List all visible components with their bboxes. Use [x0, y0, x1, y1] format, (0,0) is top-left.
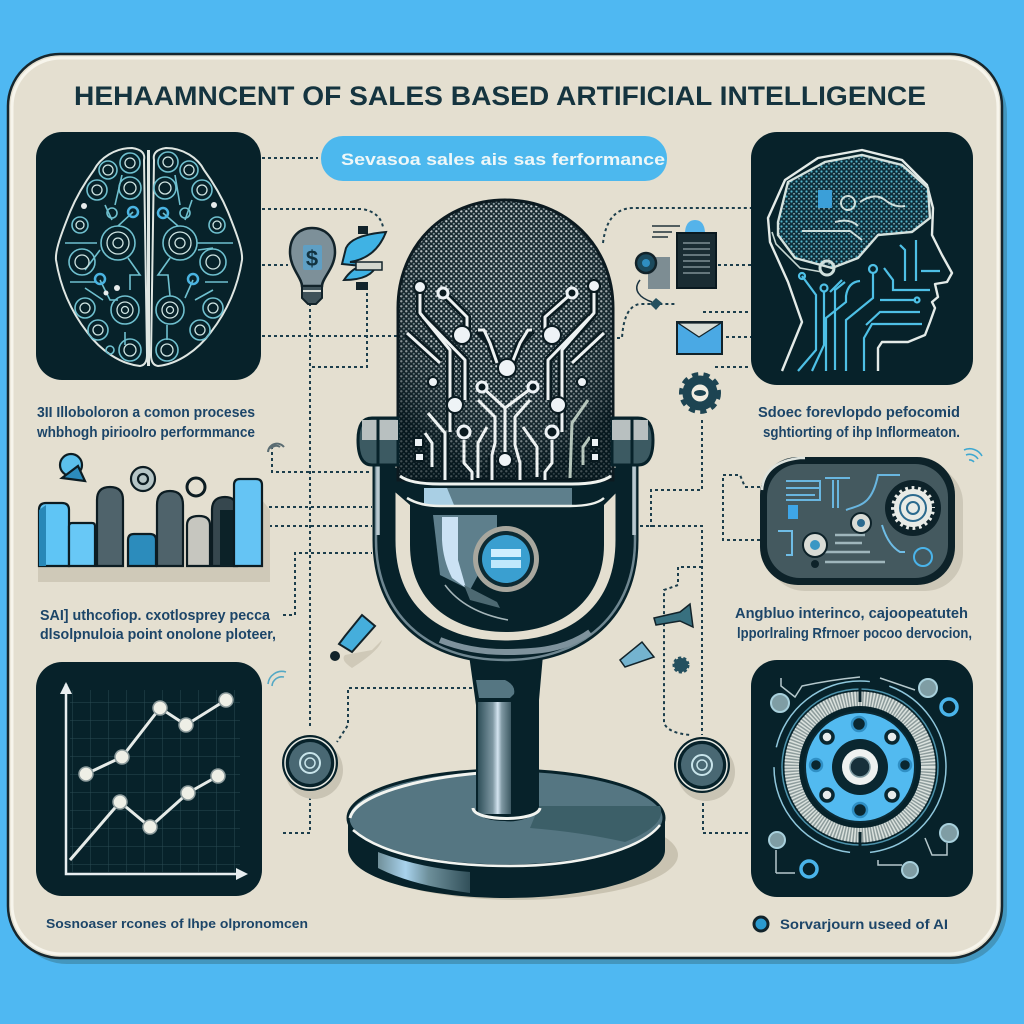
caption: right lower: lpporlraling Rfrnoer pocoo dervocion, — [737, 626, 972, 642]
caption: left lower — [40, 608, 276, 643]
caption: right lower: Angbluo interinco, cajoopeatuteh — [735, 606, 968, 622]
footer right: Sorvarjourn useed of AI — [780, 916, 948, 932]
caption: left lower: SAI] uthcofiop. cxotlosprey pecca — [40, 608, 271, 624]
speech pill: Sevasoa sales ais sas ferformance — [341, 150, 665, 169]
icon: envelope — [677, 322, 722, 354]
icon: ring — [187, 478, 205, 496]
side clamps — [358, 418, 653, 465]
icon: camera pin — [636, 253, 670, 310]
icon: wifi signal right — [964, 449, 982, 462]
mesh head — [398, 200, 613, 484]
icon: pen marker left — [330, 615, 382, 668]
panel: brain top left — [36, 132, 261, 380]
title: HEHAAMNCENT OF SALES BASED ARTIFICIAL INTELLIGENCE — [74, 81, 926, 111]
icon: wifi signal lower — [268, 671, 286, 686]
panel: gear disc bottom right — [751, 660, 973, 897]
icon: circle target — [131, 467, 155, 491]
footer icon — [754, 917, 768, 931]
stand neck — [470, 655, 542, 820]
icon: blue S dollar — [342, 226, 386, 290]
panel: chart bottom left — [36, 662, 262, 896]
icon: dial left — [282, 735, 343, 799]
footer left: Sosnoaser rcones of lhpe olpronomcen — [46, 916, 308, 931]
caption: left upper: 3II Illoboloron a comon proceses — [37, 405, 255, 421]
stand base — [348, 770, 678, 900]
icon: tag right — [620, 642, 654, 667]
caption: left upper: whbhogh pirioolro performmance — [36, 425, 255, 441]
icon: small gear right — [674, 658, 688, 672]
icon: gear — [682, 375, 718, 411]
speech pill — [321, 136, 667, 181]
panel: head top right — [751, 132, 973, 385]
icon: dial right — [674, 737, 735, 801]
caption: right upper: Sdoec forevlopdo pefocomid — [758, 405, 960, 421]
cup reflections — [407, 488, 604, 620]
icon: dollar lightbulb: $ — [306, 246, 318, 271]
icon: wifi signal left — [268, 444, 284, 452]
icon: document — [652, 220, 716, 288]
panel: dashboard middle right — [760, 457, 963, 591]
brand badge — [473, 526, 539, 592]
yoke — [376, 455, 635, 660]
icon: chat bubble — [60, 454, 85, 481]
microphone — [348, 200, 678, 900]
caption: left lower: dlsolpnuloia point onolone ploteer, — [40, 627, 276, 643]
connector lines — [262, 158, 760, 833]
icon: hammer right — [654, 604, 693, 627]
caption: right upper: sghtiorting of ihp Inflormeaton. — [763, 425, 960, 441]
icon: dollar lightbulb — [290, 228, 335, 304]
caption: right upper — [758, 405, 960, 441]
caption: left upper — [36, 405, 255, 441]
caption: right lower — [735, 606, 972, 642]
bar chart — [38, 454, 270, 582]
cup band — [395, 468, 617, 632]
circuit traces — [407, 280, 604, 480]
